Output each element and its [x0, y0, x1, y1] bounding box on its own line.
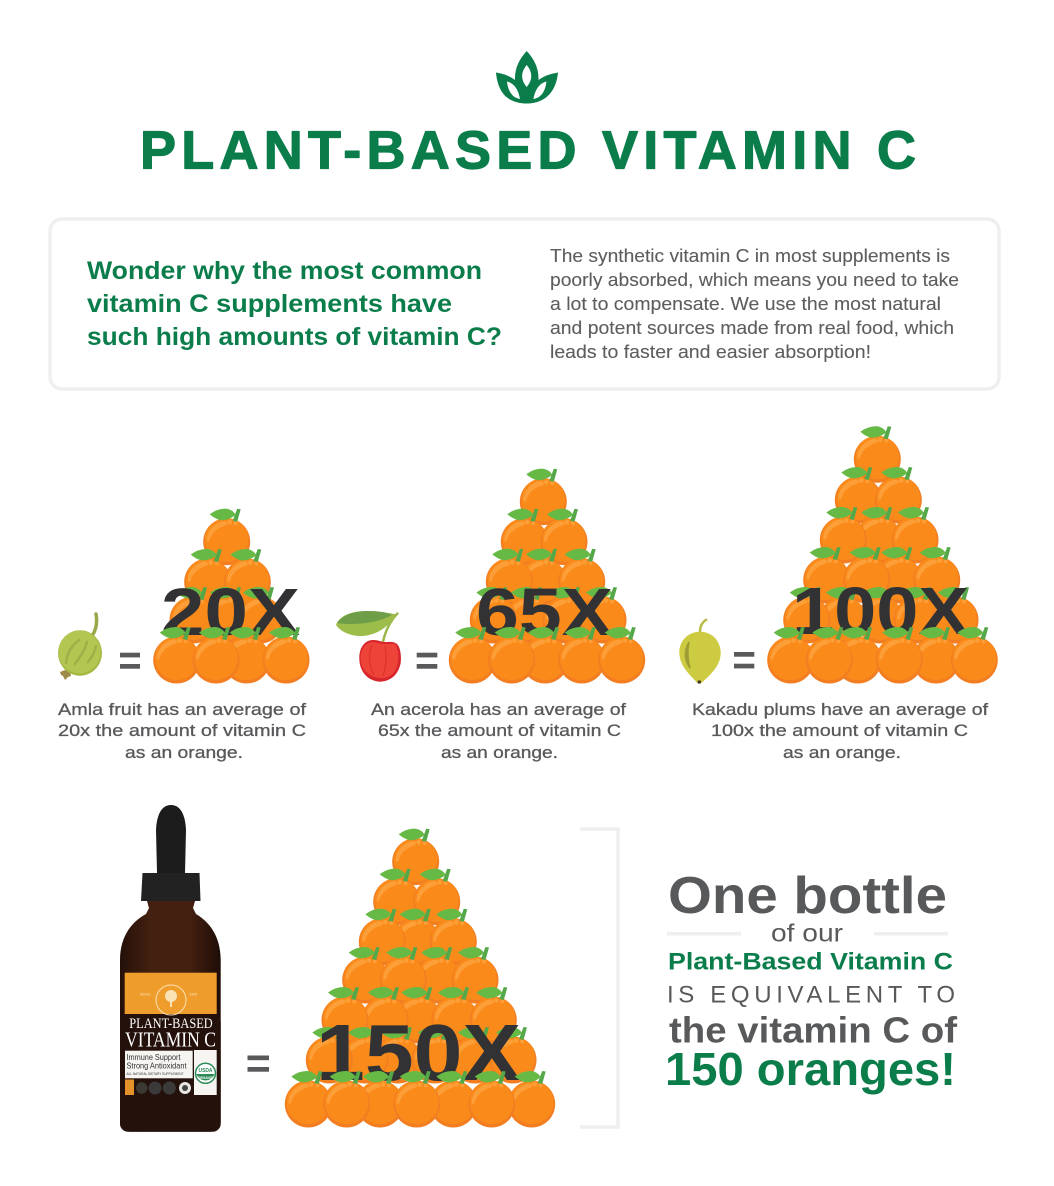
orange label — [125, 973, 217, 1014]
caption amla: as an orange. — [125, 743, 243, 762]
caption kakadu: Kakadu plums have an average of — [692, 700, 988, 719]
line: one bottle: One bottle — [668, 867, 947, 925]
intro body text: and potent sources made from real food, which — [550, 318, 954, 338]
intro question heading: vitamin C supplements have — [87, 290, 452, 318]
caption kakadu: 100x the amount of vitamin C — [711, 721, 968, 740]
orange pyramid 20X — [153, 509, 310, 684]
caption amla — [58, 700, 306, 762]
caption acerola: An acerola has an average of — [371, 700, 626, 719]
intro question heading — [87, 257, 502, 351]
brand seal: SINCE — [140, 992, 151, 996]
certification badges — [136, 1082, 191, 1094]
product bottle: Immune Support — [126, 1053, 181, 1062]
intro body text: leads to faster and easier absorption! — [550, 342, 871, 362]
equals sign 3 — [734, 652, 754, 668]
line: 150 oranges: 150 oranges! — [665, 1043, 956, 1095]
intro body text: poorly absorbed, which means you need to take — [550, 270, 959, 290]
multiplier 150X: 150X — [316, 1008, 521, 1097]
caption acerola: as an orange. — [441, 743, 558, 762]
intro question heading: such high amounts of vitamin C? — [87, 323, 502, 351]
intro body text: a lot to compensate. We use the most natural — [550, 294, 941, 314]
orange pyramid 65X — [449, 469, 645, 684]
product name: PLANT-BASED — [129, 1016, 213, 1032]
product bottle — [120, 805, 221, 1132]
glass body — [120, 901, 221, 1132]
title: PLANT-BASED VITAMIN C — [140, 120, 916, 180]
equals sign 2 — [417, 653, 437, 669]
caption kakadu: as an orange. — [783, 743, 901, 762]
intro body text — [550, 246, 959, 362]
USDA organic badge: USDA — [198, 1068, 213, 1074]
icon: green leaf logo — [496, 51, 558, 104]
multiplier 100X: 100X — [792, 574, 969, 649]
caption kakadu — [692, 700, 988, 762]
claims label — [125, 1051, 193, 1078]
icon: acerola cherry — [336, 611, 401, 682]
bracket — [580, 829, 618, 1127]
product bottle: ALL NATURAL DIETARY SUPPLEMENT — [126, 1072, 184, 1076]
brand seal: 1995 — [189, 992, 197, 996]
icon: kakadu plum — [679, 619, 721, 684]
intro body text: The synthetic vitamin C in most supplements is — [550, 246, 950, 266]
multiplier 65X: 65X — [476, 575, 613, 650]
USDA organic badge — [194, 1050, 217, 1095]
line: plant-based vitamin c: Plant-Based Vitamin C — [668, 948, 953, 975]
dark lower label area — [120, 1014, 221, 1132]
equals sign 1 — [120, 653, 140, 669]
icon: amla fruit — [58, 614, 102, 680]
orange pyramid 150X — [285, 829, 555, 1128]
caption amla: Amla fruit has an average of — [58, 700, 306, 719]
product bottle: VITAMIN C — [125, 1028, 216, 1052]
dropper bulb — [156, 805, 186, 873]
orange pyramid 100X — [767, 426, 998, 684]
caption acerola — [371, 700, 626, 762]
dropper collar — [141, 873, 200, 901]
multiplier 20X: 20X — [161, 575, 300, 650]
line: the vitamin c of: the vitamin C of — [669, 1010, 958, 1051]
equals sign 4 — [248, 1056, 269, 1072]
small orange tab — [125, 1080, 134, 1095]
caption acerola: 65x the amount of vitamin C — [378, 721, 621, 740]
USDA organic badge: ORGANIC — [198, 1076, 213, 1080]
brand seal — [140, 985, 197, 1015]
caption amla: 20x the amount of vitamin C — [58, 721, 306, 740]
product bottle: Strong Antioxidant — [126, 1062, 187, 1070]
conclusion text block — [665, 867, 958, 1095]
line: of our: of our — [771, 920, 843, 948]
line: is equivalent to: IS EQUIVALENT TO — [667, 982, 955, 1009]
intro question heading: Wonder why the most common — [87, 257, 482, 285]
panel: intro box — [50, 219, 999, 389]
